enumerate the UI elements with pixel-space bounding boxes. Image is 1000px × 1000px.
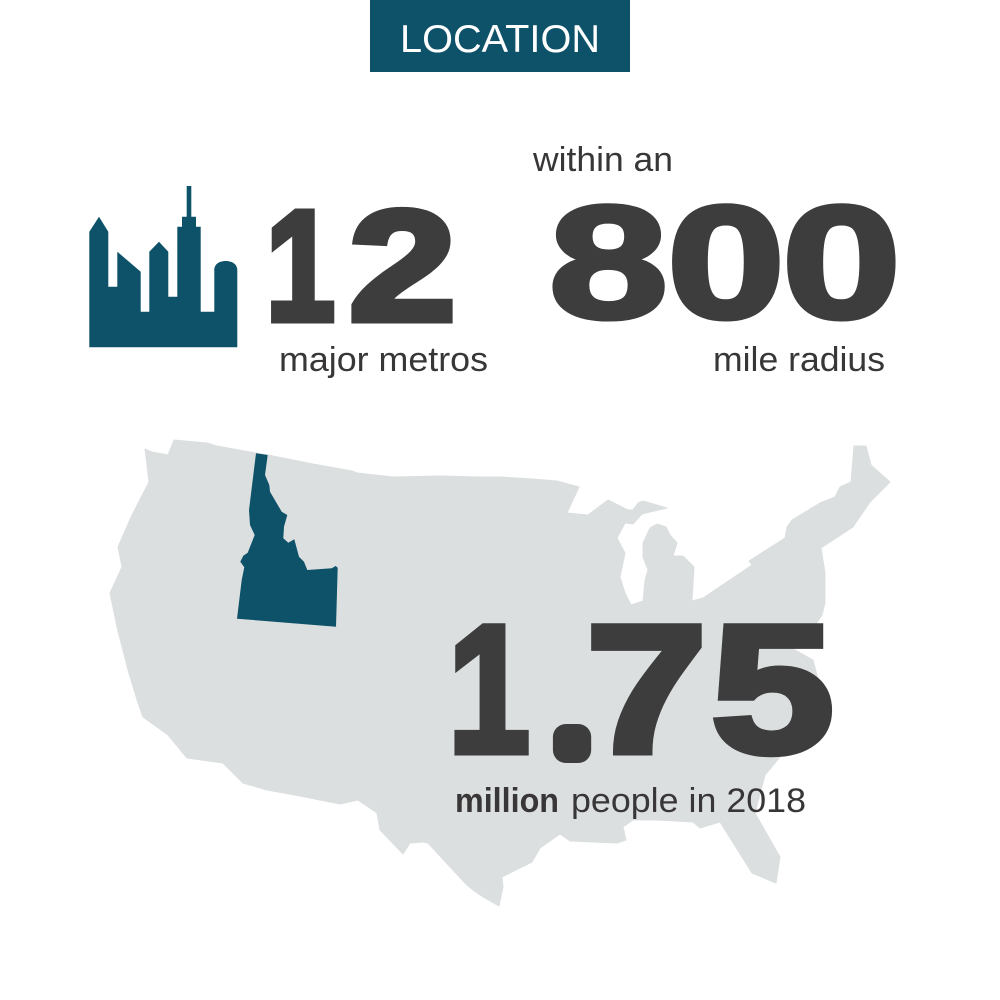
stat: 1.75 million people in 2018 (448, 587, 834, 820)
header: location: LOCATION (400, 18, 600, 61)
stat: 12 major metros (266, 178, 488, 379)
icon: city skyline (89, 186, 237, 347)
stat: 1.75 million people in 2018: people in 2018 (571, 782, 806, 820)
stat: 1.75 million people in 2018: . (560, 672, 584, 769)
map: continental United States (110, 440, 890, 906)
stat: 12 major metros: 1 (266, 178, 335, 353)
stat: 12 major metros: major metros (279, 341, 488, 379)
stat: within an 800 mile radius: within an (532, 141, 673, 179)
stat: 1.75 million people in 2018: 5 (711, 588, 834, 791)
header: location (370, 0, 630, 72)
map highlight: Idaho (237, 453, 338, 627)
stat: within an 800 mile radius (532, 141, 901, 379)
stat: 12 major metros: 2 (349, 179, 456, 354)
stat: within an 800 mile radius: 0 (667, 173, 785, 352)
stat: within an 800 mile radius: mile radius (713, 341, 885, 379)
stat: 1.75 million people in 2018: million (455, 782, 559, 820)
stat: 1.75 million people in 2018: 1 (448, 588, 530, 792)
stat: 1.75 million people in 2018: 7 (586, 587, 707, 791)
stat: within an 800 mile radius: 0 (782, 174, 901, 352)
stat: within an 800 mile radius: 8 (549, 174, 668, 352)
